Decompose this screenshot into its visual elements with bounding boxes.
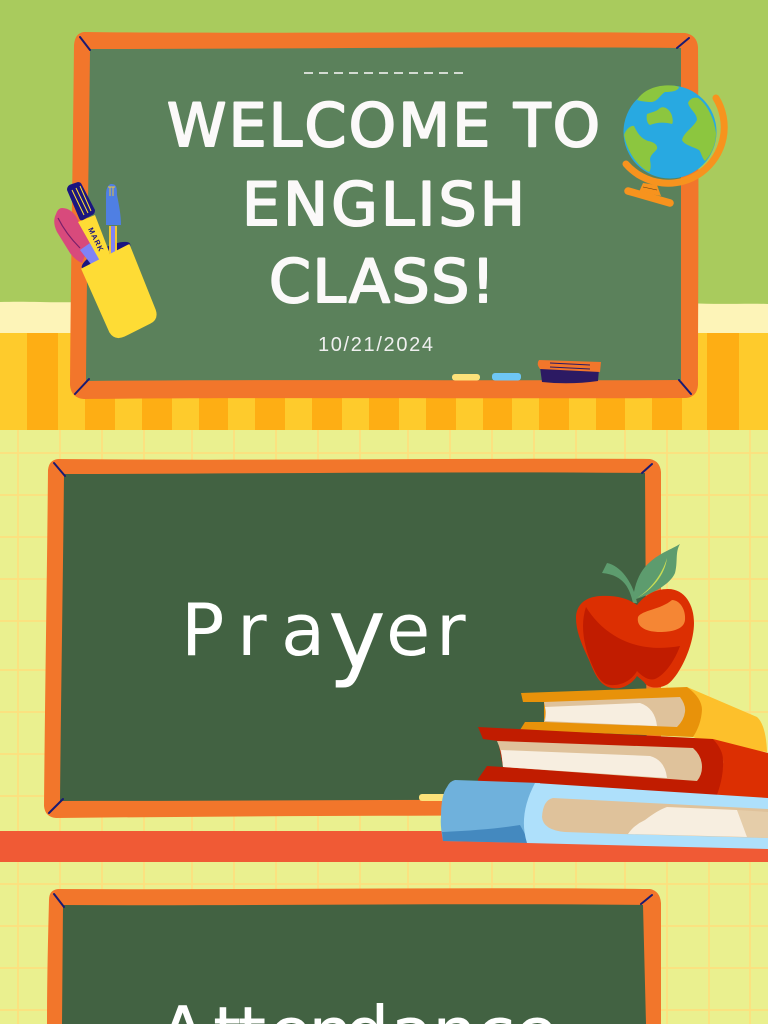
stem	[602, 563, 637, 603]
heading: Prayer: r	[237, 588, 267, 672]
top yellow book	[520, 687, 767, 752]
icon: pen and marker cup	[54, 182, 156, 337]
middle red book	[478, 727, 768, 802]
board frame	[44, 459, 661, 818]
title: ENGLISH	[242, 170, 525, 240]
yellow marker	[78, 215, 110, 261]
heading: Prayer: y	[328, 577, 386, 691]
title	[167, 91, 600, 317]
panel: classroom wall background	[0, 0, 768, 430]
heading: Prayer: e	[386, 588, 430, 672]
panel: prayer chalkboard	[44, 459, 661, 818]
pink pen	[54, 208, 90, 263]
apple body	[576, 589, 694, 688]
bottom blue book	[441, 780, 768, 849]
icon: globe	[624, 85, 724, 203]
panel: yellow grid paper background	[0, 430, 768, 1024]
heading: Prayer: r	[436, 588, 466, 672]
panel: welcome chalkboard	[70, 32, 698, 399]
frame corner joints	[75, 37, 691, 394]
title: WELCOME TO	[167, 91, 600, 161]
board frame	[70, 32, 698, 399]
red shelf	[0, 831, 768, 862]
title: CLASS!	[269, 247, 495, 317]
board surface	[60, 472, 647, 801]
cup opening	[78, 237, 134, 275]
board surface	[62, 904, 646, 1024]
decorative dashed line	[304, 72, 464, 74]
board frame	[47, 888, 661, 1024]
apple highlight	[638, 600, 685, 632]
panel: attendance chalkboard	[47, 888, 661, 1024]
icon: eraser	[538, 360, 601, 383]
board surface	[86, 47, 681, 381]
leaf	[633, 544, 680, 600]
blue pen	[109, 226, 117, 258]
icon: chalk pieces	[452, 373, 521, 380]
frame corner joints	[49, 463, 652, 813]
heading: Prayer: a	[281, 588, 325, 672]
icon: red apple	[576, 544, 694, 688]
apple shadow	[583, 607, 680, 685]
cup body	[82, 245, 156, 337]
icon: chalk piece	[419, 794, 447, 801]
frame corner joints	[54, 894, 652, 907]
icon: stack of books	[441, 687, 768, 849]
heading: Prayer: P	[181, 588, 224, 672]
date: 10/21/2024	[318, 334, 433, 356]
icon: pen and marker cup: MARK	[86, 226, 106, 254]
